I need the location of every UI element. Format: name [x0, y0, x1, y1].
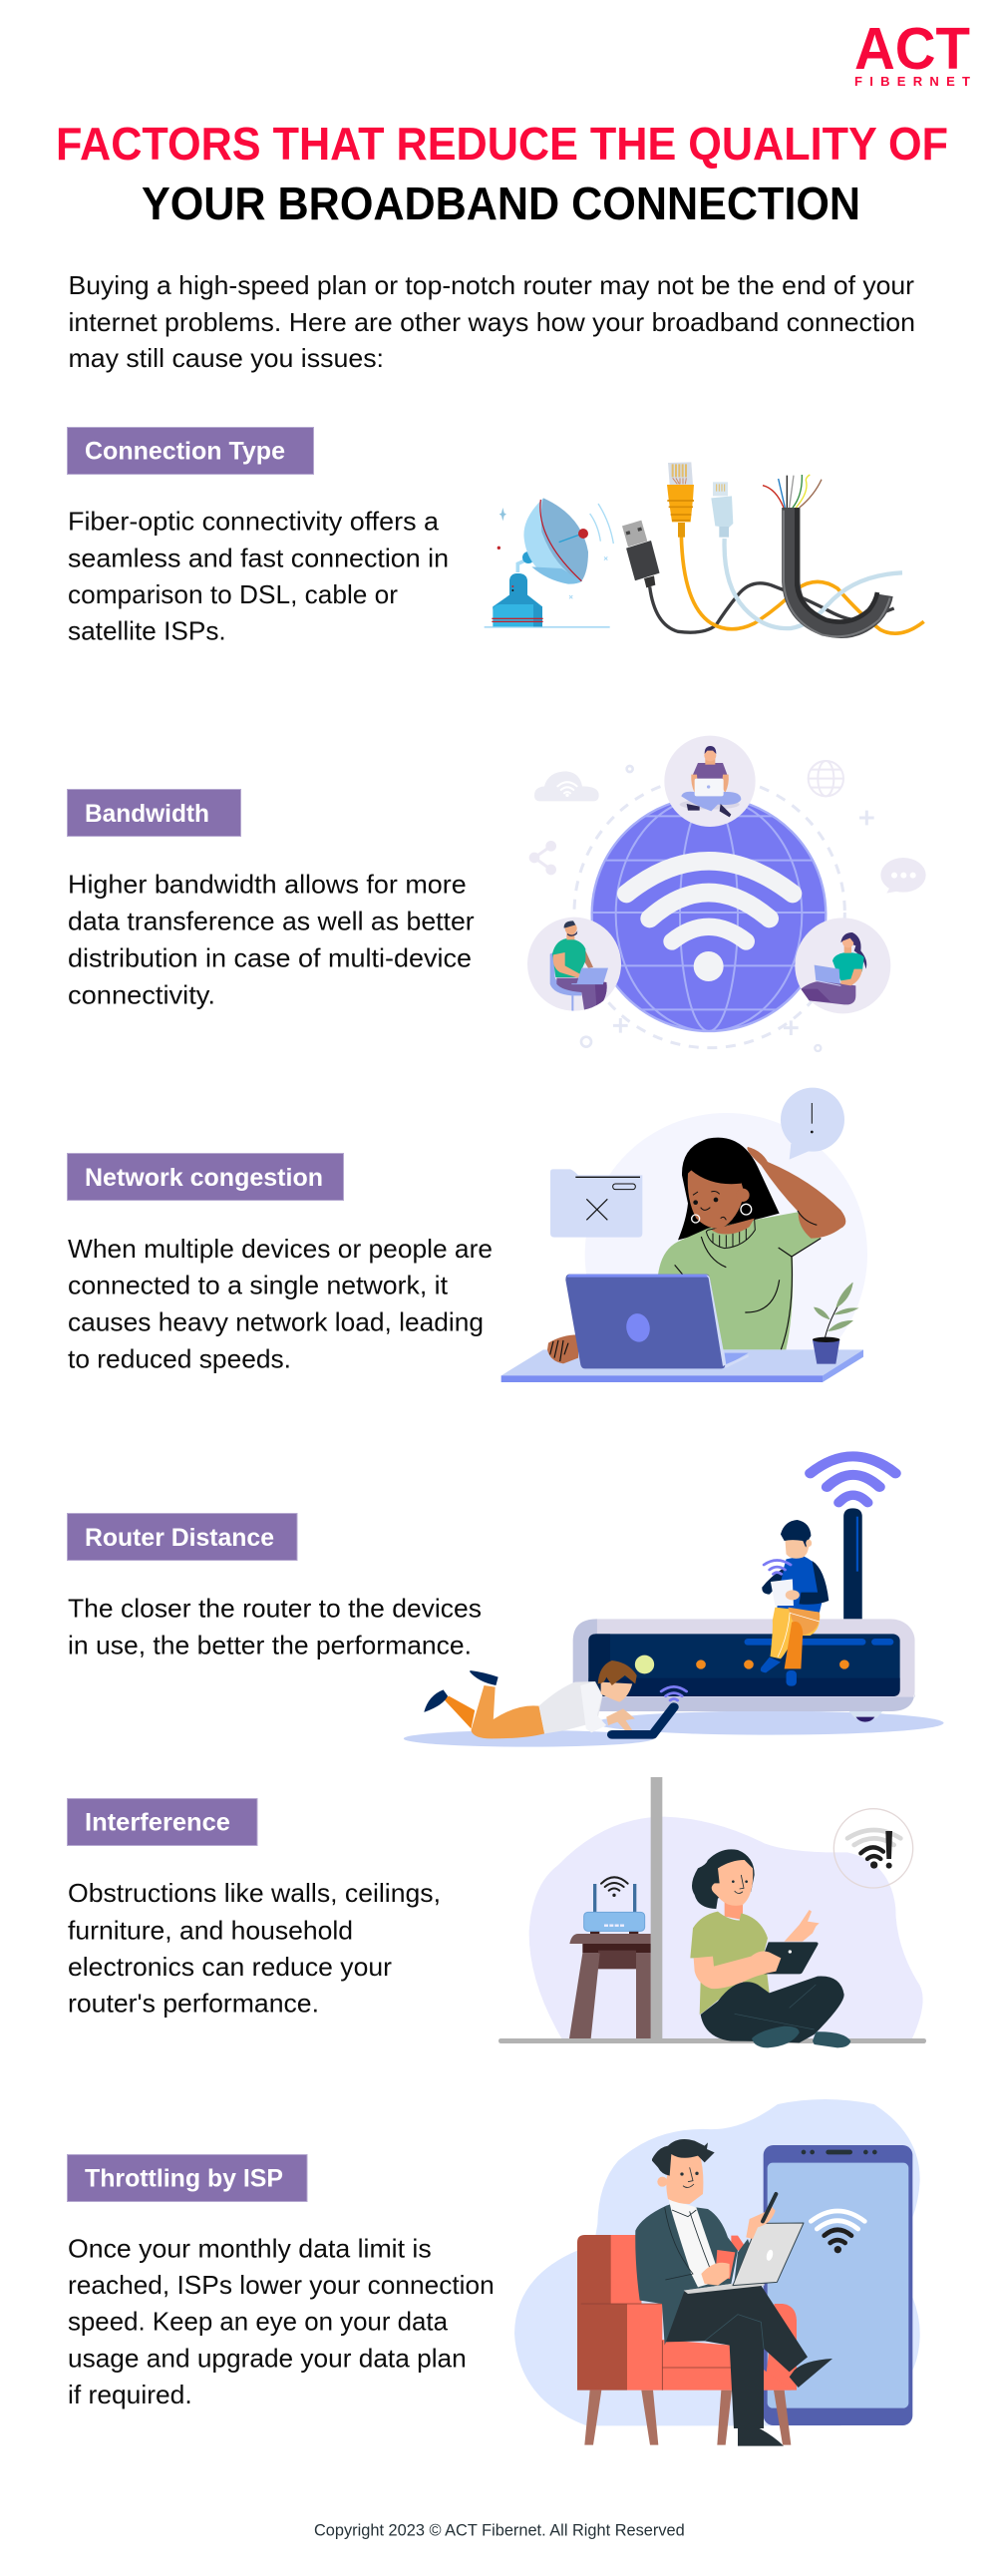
- text: network congestion: causes heavy network load, leading: [68, 1307, 484, 1337]
- text: connection type: satellite ISPs.: [68, 616, 226, 646]
- text: connection type: [68, 507, 449, 646]
- stool: [569, 1934, 651, 2038]
- background circle: [585, 1113, 867, 1349]
- text: interference: furniture, and household: [68, 1915, 353, 1945]
- text: network congestion: connected to a single network, it: [68, 1271, 449, 1300]
- text: interference: [68, 1878, 441, 2019]
- icon: ethernet plug: [667, 462, 694, 538]
- panel: bandwidth: [68, 736, 926, 1051]
- intro text: [68, 270, 915, 373]
- person lying with laptop: [424, 1660, 687, 1738]
- text: connection type: comparison to DSL, cable or: [68, 579, 398, 609]
- illustration: router with users: [404, 1456, 944, 1747]
- text: router distance: in use, the better the performance.: [68, 1630, 472, 1659]
- text: throttling by ISP: if required.: [68, 2380, 192, 2409]
- icon: wifi symbol: [626, 861, 793, 981]
- icon: large wifi: [811, 1456, 895, 1503]
- intro text: may still cause you issues:: [68, 343, 384, 373]
- user: top: [664, 736, 756, 827]
- text: throttling by ISP: usage and upgrade your data plan: [68, 2343, 467, 2373]
- decorative icons: [529, 761, 926, 1051]
- heading: connection type: [68, 427, 313, 475]
- icon: router with signal: [584, 1877, 645, 1934]
- heading: bandwidth: [68, 790, 241, 836]
- title: YOUR BROADBAND CONNECTION: [142, 178, 860, 229]
- panel: interference: [68, 1777, 926, 2047]
- icon: weak wifi warning: [833, 1809, 913, 1888]
- armchair: [577, 2235, 797, 2445]
- illustration: man on armchair with phone: [514, 2099, 920, 2446]
- panel: throttling by ISP: [68, 2099, 920, 2446]
- text: interference: router's performance.: [68, 1989, 319, 2019]
- heading: router distance: [68, 1514, 297, 1560]
- table: [501, 1349, 863, 1382]
- user: left: [527, 918, 621, 1011]
- user: right: [795, 918, 890, 1013]
- text: bandwidth: distribution in case of multi-device: [68, 943, 472, 973]
- woman: [658, 1138, 845, 1349]
- heading: interference: Interference: [85, 1809, 230, 1837]
- icon: cables: [650, 475, 924, 636]
- heading: connection type: Connection Type: [85, 437, 285, 465]
- icon: phone: [764, 2145, 912, 2425]
- heading: interference: [68, 1799, 257, 1845]
- man with laptop: [635, 2139, 832, 2446]
- icon: potted plant: [813, 1283, 859, 1364]
- title: [56, 118, 948, 229]
- text: bandwidth: Higher bandwidth allows for more: [68, 870, 467, 900]
- footer copyright: Copyright 2023 © ACT Fibernet. All Right Reserved: [314, 2521, 685, 2540]
- floor and wall: [498, 1777, 926, 2043]
- illustration: worried woman at laptop: [501, 1088, 867, 1395]
- heading: network congestion: Network congestion: [85, 1164, 323, 1192]
- ground shadow: [404, 1711, 944, 1747]
- heading: network congestion: [68, 1153, 343, 1201]
- logo: ACT Fibernet: ACT: [854, 16, 970, 82]
- text: bandwidth: connectivity.: [68, 979, 215, 1009]
- icon: lightning plug: [711, 482, 733, 538]
- globe: [591, 797, 828, 1031]
- icon: router: [573, 1508, 915, 1722]
- text: router distance: The closer the router to the devices: [68, 1593, 482, 1623]
- text: network congestion: When multiple devices or people are: [68, 1234, 493, 1264]
- text: interference: electronics can reduce your: [68, 1952, 392, 1982]
- text: router distance: [68, 1593, 482, 1659]
- icon: laptop: [565, 1275, 749, 1368]
- text: bandwidth: data transference as well as better: [68, 907, 475, 936]
- background blob: [529, 1817, 923, 2038]
- heading: router distance: Router Distance: [85, 1524, 274, 1552]
- heading: throttling by ISP: Throttling by ISP: [85, 2164, 283, 2192]
- icon: speech bubble with exclamation: [781, 1088, 844, 1160]
- panel: router distance: [68, 1456, 944, 1747]
- background blob: [514, 2099, 920, 2425]
- panel: connection type: [68, 427, 924, 646]
- text: connection type: seamless and fast connection in: [68, 543, 449, 572]
- intro text: Buying a high-speed plan or top-notch router may not be the end of your: [68, 270, 914, 300]
- text: throttling by ISP: Once your monthly data limit is: [68, 2233, 432, 2263]
- woman with tablet: [690, 1849, 850, 2047]
- logo: ACT Fibernet: FIBERNET: [854, 74, 970, 89]
- illustration: woman behind wall from router: [498, 1777, 926, 2047]
- text: throttling by ISP: [68, 2233, 495, 2409]
- text: interference: Obstructions like walls, ceilings,: [68, 1878, 441, 1908]
- text: throttling by ISP: reached, ISPs lower your connection: [68, 2270, 495, 2300]
- text: network congestion: to reduced speeds.: [68, 1344, 291, 1374]
- heading: bandwidth: Bandwidth: [85, 800, 209, 828]
- illustration: wifi globe with users: [527, 736, 926, 1051]
- person sitting on router: [761, 1520, 829, 1686]
- text: throttling by ISP: speed. Keep an eye on your data: [68, 2307, 449, 2337]
- icon: satellite dish: [485, 498, 613, 628]
- text: network congestion: [68, 1234, 493, 1374]
- title: FACTORS THAT REDUCE THE QUALITY OF: [56, 118, 948, 170]
- text: connection type: Fiber-optic connectivity offers a: [68, 507, 440, 537]
- panel: network congestion: [68, 1088, 867, 1395]
- illustration: satellite dish and cables: [485, 462, 924, 636]
- text: bandwidth: [68, 870, 475, 1009]
- icon: folder with error: [550, 1169, 642, 1238]
- hand: [547, 1334, 578, 1363]
- icon: USB plug: [622, 521, 659, 587]
- heading: throttling by ISP: [68, 2154, 307, 2202]
- intro text: internet problems. Here are other ways how your broadband connection: [68, 307, 915, 337]
